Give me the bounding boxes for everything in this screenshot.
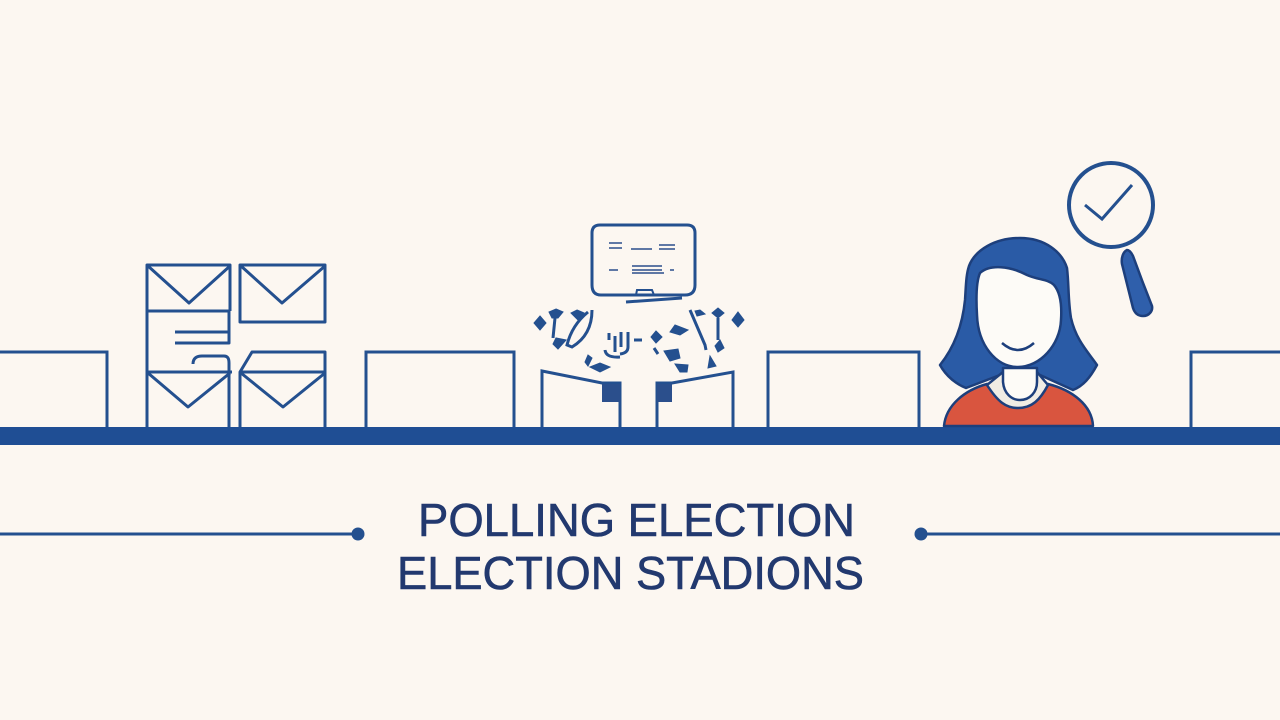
collar	[987, 372, 1048, 408]
checkmark	[1085, 185, 1132, 219]
icon: open ballot folders	[542, 371, 733, 427]
handle	[1122, 250, 1152, 316]
title: POLLING ELECTION	[418, 494, 855, 546]
icon: magnifier with check	[1069, 163, 1153, 316]
title: ELECTION STADIONS	[397, 547, 864, 599]
lens	[1069, 163, 1153, 247]
shirt	[944, 384, 1093, 426]
figure: woman	[940, 238, 1097, 426]
icon: monitor	[592, 225, 695, 302]
right connector line	[914, 528, 1280, 540]
left connector line	[0, 528, 364, 540]
neck	[1003, 368, 1037, 400]
title	[397, 494, 864, 599]
monitor squiggles	[609, 243, 675, 273]
icon: stacked envelopes	[147, 265, 325, 427]
ground bar	[0, 427, 1280, 445]
empty station boxes	[0, 352, 1280, 427]
smile	[1002, 343, 1034, 350]
hair	[940, 238, 1097, 390]
face	[976, 267, 1061, 367]
ballots scattering	[534, 308, 744, 372]
